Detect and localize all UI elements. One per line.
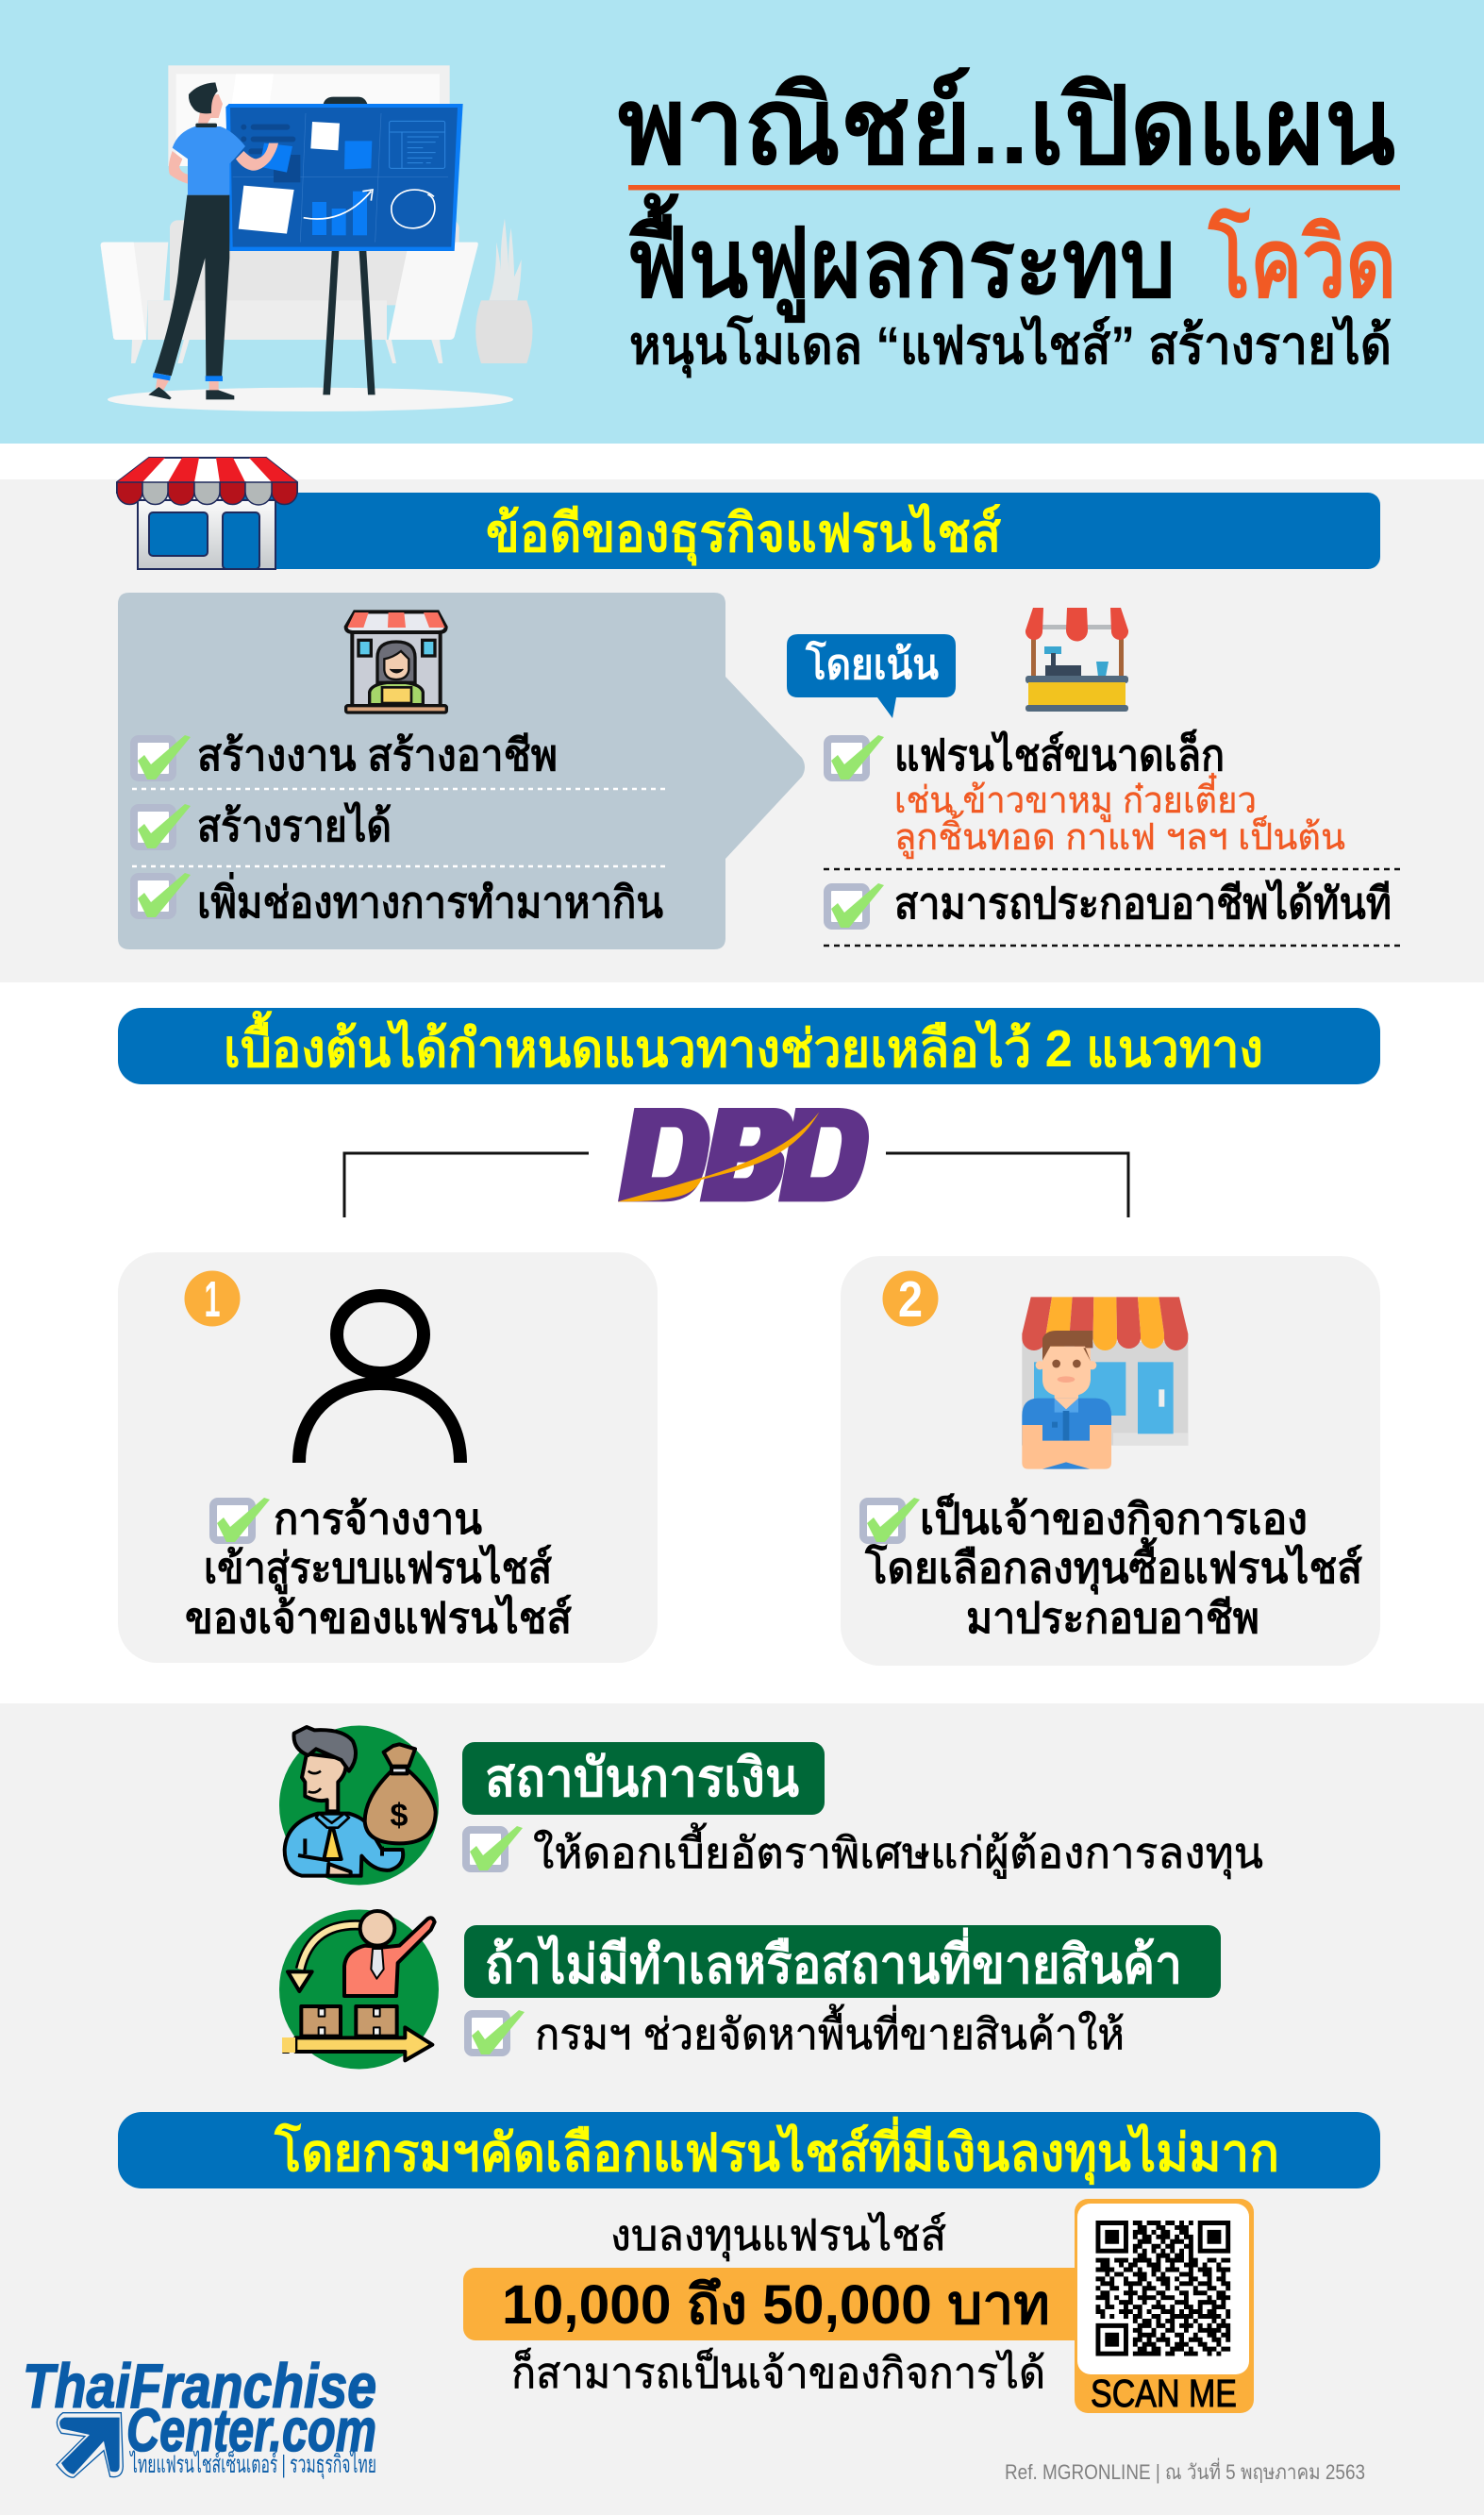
text: owner	[863, 1493, 1363, 1642]
banner: low investment selection: โดยกรมฯคัดเลือกแฟรนไชส์ที่มีเงินลงทุนไม่มาก	[274, 2116, 1279, 2186]
text: employment: ของเจ้าของแฟรนไชส์	[185, 1593, 573, 1642]
icon: logo arrow	[57, 2413, 123, 2477]
badge 1: 1	[204, 1271, 221, 1328]
icon: food stall	[1025, 608, 1128, 712]
divider	[132, 789, 667, 866]
panel: QR code	[1075, 2199, 1254, 2415]
callout: focus on	[787, 634, 956, 718]
icon: man with money bag: $	[391, 1798, 409, 1834]
examples text: เช่น ข้าวขาหมู ก๋วยเตี๋ยว	[894, 773, 1257, 822]
illustration: man presenting at a blue board	[101, 65, 532, 411]
text: franchise investment budget: งบลงทุนแฟรนไชส์	[610, 2211, 946, 2261]
badge 2: 2	[898, 1271, 923, 1328]
source note: Ref. MGRONLINE | ณ วันที่ 5 พฤษภาคม 2563	[1005, 2457, 1365, 2484]
text: owner: มาประกอบอาชีพ	[966, 1594, 1259, 1642]
panel: header	[0, 0, 1484, 444]
icon: man with money bag	[279, 1725, 439, 1886]
heading: advantages of franchise business: ข้อดีของธุรกิจแฟรนไชส์	[486, 502, 1002, 566]
title line 1: พาณิชย์..เปิดแผน	[618, 67, 1395, 187]
check item: more ways to earn: เพิ่มช่องทางการทำมาหากิน	[197, 872, 663, 927]
check item: department helps find location: กรมฯ ช่วยจัดหาพื้นที่ขายสินค้าให้	[535, 2004, 1125, 2058]
badge 2	[883, 1270, 938, 1328]
panel: financial institutions	[279, 1725, 1263, 1886]
badge 1	[185, 1270, 240, 1328]
subtitle: หนุนโมเดล “แฟรนไชส์” สร้างรายได้	[629, 314, 1392, 378]
panel: advantages list arrow box	[118, 593, 805, 949]
banner: two approaches	[118, 1008, 1380, 1084]
panel: card 1 employment	[118, 1252, 658, 1663]
icon: man with boxes	[279, 1910, 439, 2069]
text: owner: โดยเลือกลงทุนซื้อแฟรนไชส์	[864, 1536, 1363, 1595]
icon: DBD logo	[618, 1108, 869, 1201]
icon: woman in shop	[346, 612, 446, 713]
text: employment: เข้าสู่ระบบแฟรนไชส์	[204, 1543, 552, 1595]
check item: special interest: ให้ดอกเบี้ยอัตราพิเศษแก่ผู้ต้องการลงทุน	[533, 1822, 1263, 1879]
logo: ThaiFranchise Center: ไทยแฟรนไชส์เซ็นเตอร์ | รวมธุรกิจไทย	[129, 2449, 376, 2479]
amount bar: 10,000 ถึง 50,000 บาท	[502, 2274, 1050, 2336]
check item: create jobs: สร้างงาน สร้างอาชีพ	[197, 730, 558, 780]
panel: small franchise focus: แฟรนไชส์ขนาดเล็ก	[894, 729, 1225, 780]
label: no shop or location: ถ้าไม่มีทำเลหรือสถานที่ขายสินค้า	[485, 1927, 1182, 1994]
logo: ThaiFranchise Center	[23, 2351, 376, 2479]
text: employment: การจ้างงาน	[274, 1495, 482, 1543]
panel: card 2 owner	[841, 1256, 1380, 1666]
text: owner: เป็นเจ้าของกิจการเอง	[920, 1493, 1308, 1543]
QR pattern	[1096, 2222, 1230, 2354]
title highlight: โควิด	[1208, 208, 1396, 317]
panel: small franchise focus: สามารถประกอบอาชีพได้ทันที	[894, 879, 1392, 928]
title line 2: ฟื้นฟูผลกระทบ	[626, 193, 1176, 324]
connector lines	[344, 1153, 1128, 1217]
panel: advantages banner	[117, 458, 1380, 569]
logo: ThaiFranchise Center: Center.com	[126, 2396, 376, 2464]
check item: create income: สร้างรายได้	[197, 801, 392, 850]
panel: small franchise focus	[824, 729, 1401, 946]
check item: create income	[134, 801, 392, 850]
panel: no location	[279, 1910, 1221, 2069]
scan me label: SCAN ME	[1091, 2372, 1237, 2415]
callout: focus on: โดยเน้น	[805, 639, 939, 688]
logo: ThaiFranchise Center: ThaiFranchise	[23, 2351, 376, 2421]
banner: low investment selection	[118, 2112, 1380, 2188]
icon: person outline	[299, 1296, 460, 1463]
icon: storefront	[117, 458, 297, 569]
panel: small franchise focus: ลูกชิ้นทอด กาแฟ ฯลฯ เป็นต้น	[894, 810, 1345, 859]
label: financial institutions: สถาบันการเงิน	[485, 1748, 799, 1807]
text: can become a business owner: ก็สามารถเป็นเจ้าของกิจการได้	[511, 2348, 1045, 2397]
icon: shop owner	[1022, 1297, 1188, 1469]
text: employment	[185, 1495, 573, 1642]
title underline	[628, 185, 1400, 191]
banner: two approaches: เบื้องต้นได้กำหนดแนวทางช่วยเหลือไว้ 2 แนวทาง	[224, 1011, 1263, 1078]
